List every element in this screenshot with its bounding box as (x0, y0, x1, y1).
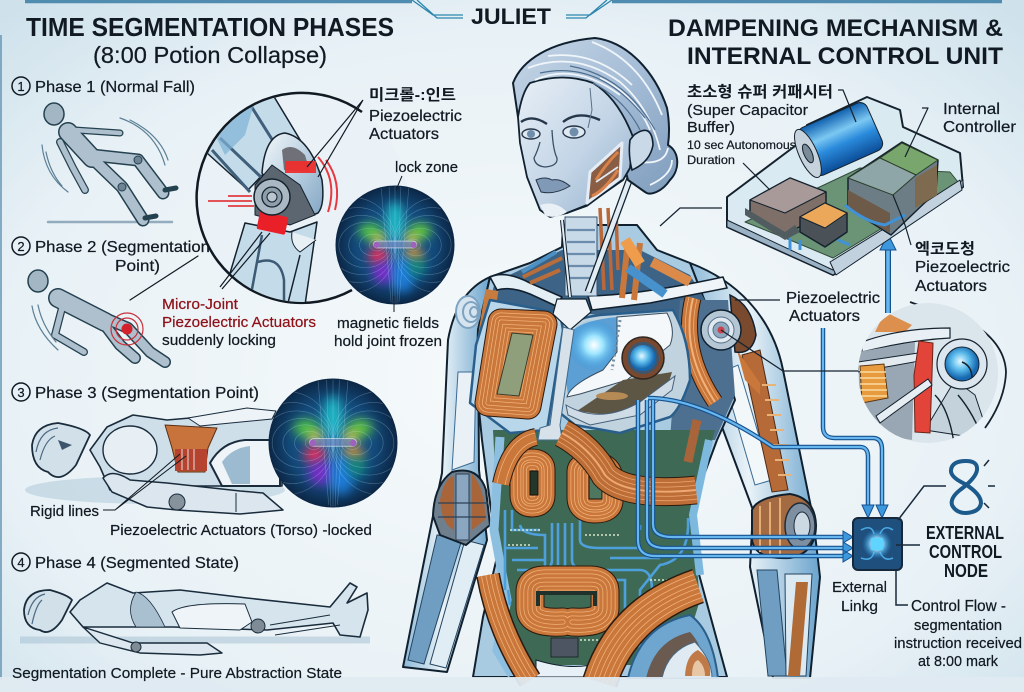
knee actuator label: Actuators (369, 126, 439, 143)
knee actuator label: 미크롤-:인트 (369, 86, 456, 104)
right heading (668, 15, 1003, 70)
external control node text (926, 523, 1004, 581)
neck struts (588, 178, 630, 292)
lower limb (225, 222, 317, 305)
controller actuator label: Actuators (915, 278, 987, 295)
magnetic fields caption: hold joint frozen (334, 333, 442, 350)
red actuator pads (285, 161, 316, 173)
infinity / 8 icon (896, 460, 995, 545)
right chest cavity (670, 300, 735, 440)
controller actuator label: 엑코도청 (915, 240, 975, 258)
magnetic fields caption: magnetic fields (337, 315, 439, 332)
phase 3 label: 3 (17, 385, 25, 400)
control flow note: segmentation (914, 617, 1002, 634)
left elbow joint (433, 470, 490, 545)
head (513, 38, 677, 217)
left heading (26, 12, 394, 68)
collar cavity (490, 250, 705, 320)
orange strap at right shoulder (689, 298, 760, 402)
vertical and horizontal signal lines (638, 328, 882, 556)
right heading: INTERNAL CONTROL UNIT (687, 43, 1003, 70)
controller actuator label (915, 240, 1010, 295)
phase 4 label: Phase 4 (Segmented State) (35, 555, 239, 572)
header band with JULIET title (25, 0, 1002, 29)
title: Juliet: JULIET (471, 4, 552, 29)
phase 4 label: 4 (17, 555, 25, 570)
super capacitor (789, 100, 885, 181)
shoulder actuator label (735, 290, 880, 325)
left chest copper coil (488, 322, 544, 406)
leader lines for knee (307, 100, 363, 177)
leader lines for micro-joint label (220, 232, 270, 289)
pcb (745, 168, 958, 258)
lower stomach coil (530, 580, 605, 622)
micro-joint red caption: Piezoelectric Actuators (162, 314, 316, 331)
orange shoulder strap left (478, 290, 492, 375)
arrowheads (843, 505, 888, 562)
phase 2 label: Phase 2 (Segmentation (35, 239, 210, 256)
knee housing (262, 133, 323, 222)
blue control flow lines and arrows (638, 234, 896, 562)
external control node text: EXTERNAL (926, 523, 1004, 543)
external control node chip (853, 518, 902, 570)
right heading: DAMPENING MECHANISM & (668, 15, 1003, 42)
micro-joint red caption (162, 296, 316, 349)
magnified knee joint circle (195, 92, 363, 304)
left chest panel ring (470, 300, 563, 433)
gray layers (858, 342, 915, 440)
external control node text: CONTROL (929, 542, 1002, 562)
lower arm and hand (103, 473, 283, 514)
outer shoulder contour (910, 302, 1006, 428)
controller actuator label: Piezoelectric (915, 259, 1010, 276)
phase 2 figure: android with locking knee (28, 256, 198, 362)
external link label (832, 579, 887, 615)
phase 2 label: 2 (17, 239, 25, 254)
cheek panel (587, 143, 622, 203)
capacitor labels: Duration (687, 153, 735, 167)
phase 2 label (12, 237, 210, 275)
magnetic lens 2 (242, 379, 424, 507)
torso silhouette (473, 225, 735, 677)
lower chip (551, 638, 578, 657)
sternum, clavicle bars and chest strut (490, 275, 727, 440)
internal controller label: Internal (943, 101, 1000, 118)
control flow note: instruction received (894, 635, 1022, 652)
phase 3 figure: android lying with locked torso (25, 408, 285, 514)
internal controller unit (660, 90, 963, 275)
external control node text: NODE (944, 561, 988, 581)
hub (254, 179, 290, 215)
leaders (660, 90, 928, 245)
orange torso actuators (165, 425, 217, 472)
left heading: TIME SEGMENTATION PHASES (26, 12, 394, 42)
left edge stripe (0, 35, 2, 680)
internal controller label: Controller (943, 119, 1016, 136)
left heading: (8:00 Potion Collapse) (93, 42, 327, 68)
white strut (876, 379, 932, 423)
magnetic lens 1 (311, 186, 479, 304)
central chest window: glass, white casing and blue core (560, 310, 690, 433)
control flow note: Control Flow - (911, 598, 1006, 615)
right hip joint (628, 615, 718, 678)
completion caption: Segmentation Complete - Pure Abstraction State (12, 665, 342, 682)
abdominal copper bands (501, 420, 697, 492)
lower belly silver (536, 660, 602, 677)
control flow note (894, 570, 1022, 670)
knee actuator label: Piezoelectric (369, 108, 462, 125)
hair silhouette with bun (513, 38, 677, 194)
internal controller label (943, 101, 1016, 136)
phase 1 label: 1 (17, 79, 25, 94)
right elbow joint (752, 494, 816, 558)
knee actuator label (369, 86, 462, 143)
external link label: Linkg (841, 598, 878, 615)
face (518, 78, 633, 217)
blue traces in box (790, 205, 905, 250)
phase 1 figure: falling android (42, 103, 176, 222)
capacitor labels (687, 83, 833, 167)
left arm (403, 277, 490, 672)
magnetic fields caption (334, 296, 442, 350)
torso actuators label: Piezoelectric Actuators (Torso) -locked (110, 522, 372, 539)
red lock signals (208, 196, 254, 206)
control flow note: at 8:00 mark (918, 653, 998, 670)
head (32, 423, 90, 477)
left shoulder spiral (456, 296, 480, 328)
right shoulder actuator joint (701, 295, 756, 352)
red lock rings on knee (122, 324, 132, 334)
hip copper bands (488, 575, 698, 682)
upper white band (862, 328, 950, 352)
green controller board stack (848, 142, 938, 235)
lower orange stripes (860, 364, 888, 403)
abdominal coils (522, 461, 611, 511)
ear (629, 130, 653, 170)
dark gear around hub (255, 165, 315, 225)
capacitor labels: (Super Capacitor (687, 102, 808, 119)
phase 1 label: Phase 1 (Normal Fall) (35, 79, 195, 96)
lock zone label: lock zone (395, 159, 458, 176)
lock zone label (395, 159, 458, 190)
transparent enclosure (727, 97, 963, 275)
red actuator bar (914, 341, 933, 433)
phase 3 label: Phase 3 (Segmentation Point) (35, 385, 259, 402)
circuit board abdomen (493, 430, 715, 665)
upward arrow to controller (885, 245, 891, 313)
blue circuit traces (505, 510, 690, 660)
blue sphere (937, 339, 987, 389)
memory block (745, 178, 826, 240)
right arm (690, 263, 820, 678)
shoulder actuator label: Actuators (789, 308, 860, 325)
nose and mouth (534, 130, 557, 167)
shoulder magnified circle (721, 302, 1006, 450)
capacitor labels: 초소형 슈퍼 커패시터 (687, 83, 833, 101)
phase 4 figure: android lying still (20, 583, 370, 655)
upper orange stripes (875, 314, 912, 332)
orange chip (800, 203, 847, 247)
capacitor labels: Buffer) (687, 119, 735, 136)
hair strands (528, 42, 672, 185)
neck with copper cables (522, 178, 690, 300)
head (24, 590, 72, 632)
micro-joint red caption: suddenly locking (162, 332, 276, 349)
rigid lines label (30, 454, 186, 520)
upper limb (208, 98, 302, 190)
phase 2 label: Point) (115, 258, 160, 275)
rigid lines label: Rigid lines (30, 503, 99, 520)
external link label: External (832, 579, 887, 596)
shoulder actuator label: Piezoelectric (786, 290, 880, 307)
central figure: Juliet cutaway android (403, 38, 820, 682)
bottom fade (0, 677, 1024, 692)
capacitor labels: 10 sec Autonomous (687, 138, 796, 152)
eyes and brows (521, 115, 600, 124)
micro-joint red caption: Micro-Joint (162, 296, 239, 313)
